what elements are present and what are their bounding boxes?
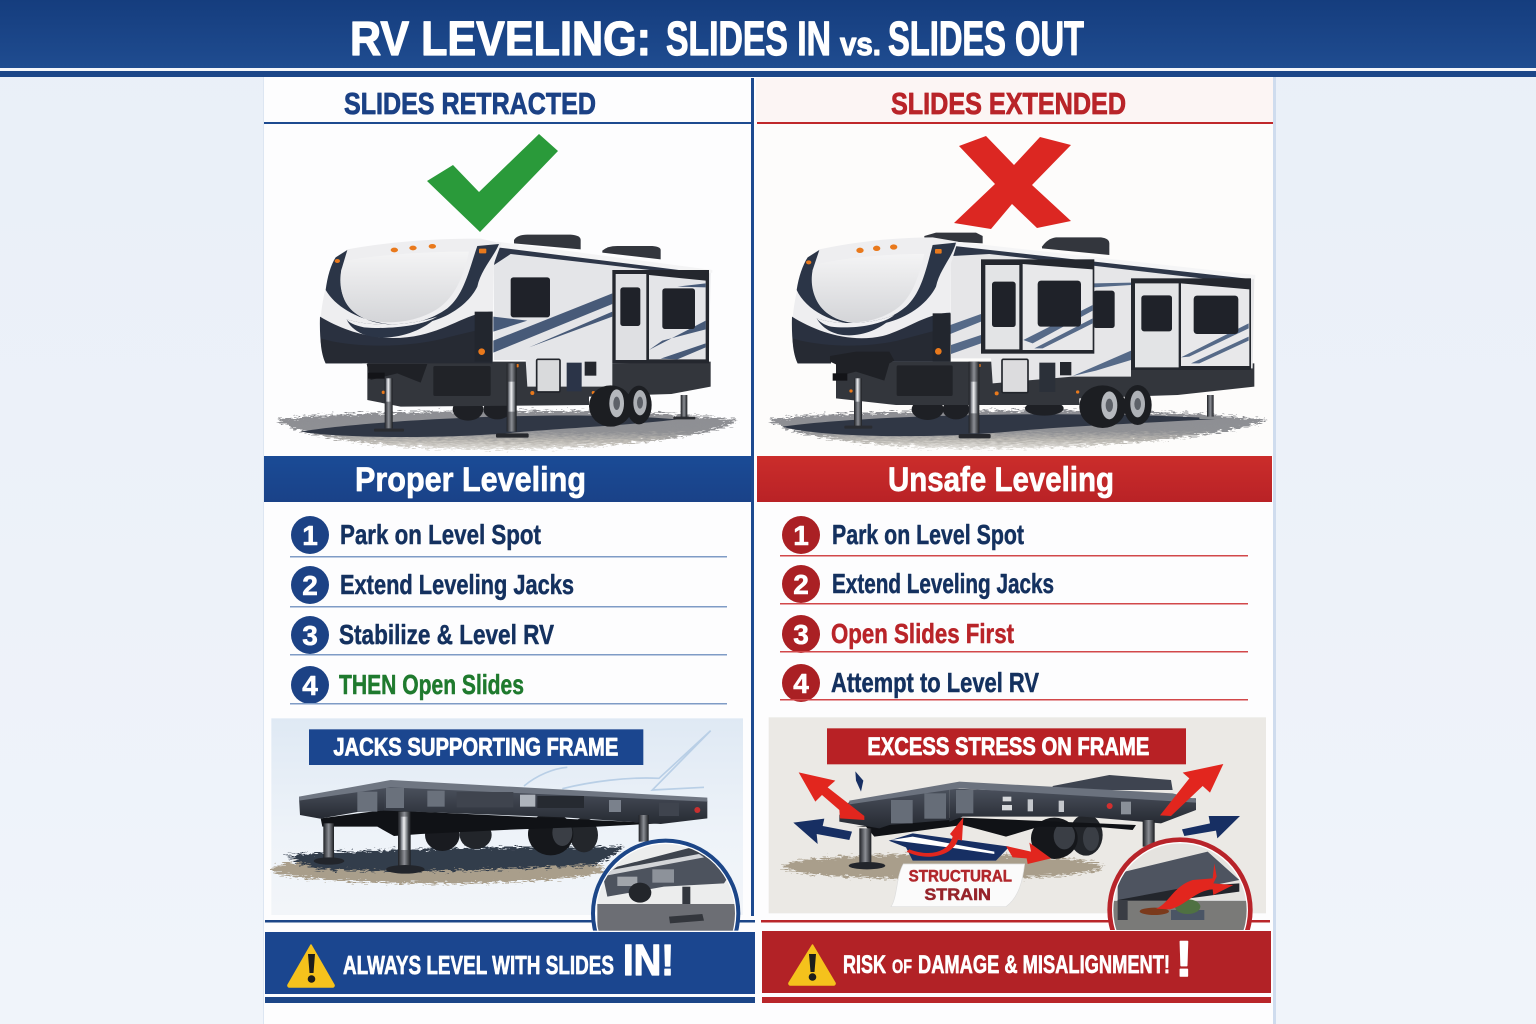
- center sheet: [263, 76, 1276, 1024]
- title: RV LEVELING:: [350, 13, 651, 66]
- right section banner: [757, 456, 1272, 502]
- step 2: Extend Leveling Jacks: [832, 568, 1054, 599]
- blue strut: [889, 833, 1009, 861]
- title: vs.: [840, 26, 881, 62]
- front cap: [320, 239, 501, 363]
- callout: structural strain: STRUCTURAL: [909, 866, 1012, 885]
- step 1: 1: [302, 520, 318, 551]
- title: SLIDES OUT: [888, 13, 1084, 66]
- chassis: [836, 362, 1254, 405]
- label: [827, 728, 1186, 764]
- left steps list: [290, 516, 727, 704]
- ground: [271, 855, 604, 883]
- callout: structural strain: STRAIN: [924, 885, 991, 904]
- body side: [494, 243, 711, 387]
- small blue pointer: [855, 771, 863, 792]
- step 3: Open Slides First: [831, 618, 1014, 649]
- arrow: curved red: [907, 817, 963, 857]
- arrow: red lower right: [1006, 843, 1051, 864]
- window: [511, 277, 550, 317]
- left warning banner: [265, 932, 755, 1003]
- jacks: [374, 363, 695, 438]
- step 4: Attempt to Level RV: [831, 667, 1039, 698]
- side swooshes: [493, 293, 612, 353]
- side swooshes: [950, 283, 1131, 376]
- thin rule left: [265, 920, 755, 922]
- step 1: Park on Level Spot: [832, 519, 1024, 550]
- roof AC units: [924, 233, 1109, 255]
- slide box: [612, 270, 709, 363]
- center divider: [751, 78, 754, 916]
- jacks: [849, 820, 1155, 869]
- right warning banner: DAMAGE & MISALIGNMENT!: [918, 951, 1170, 979]
- hitch: [367, 364, 427, 383]
- far wheels: [453, 398, 483, 421]
- slide boxes: [981, 259, 1094, 354]
- left section banner: Proper Leveling: [355, 461, 586, 499]
- step 4: [780, 664, 1248, 702]
- inset: jack close-up: [591, 838, 740, 931]
- jacks: [314, 812, 649, 874]
- left column heading: SLIDES RETRACTED: [344, 86, 596, 121]
- wheels: [1069, 814, 1103, 856]
- step 3: [290, 616, 727, 656]
- title: [350, 13, 1084, 66]
- label: JACKS SUPPORTING FRAME: [333, 734, 618, 761]
- panel: excess stress on frame: [769, 717, 1266, 913]
- arrow: red up-right: [1160, 764, 1223, 816]
- right warning banner: !: [1176, 931, 1192, 987]
- inset: blocks under jack: [1107, 837, 1253, 930]
- right warning banner: RISK: [843, 951, 886, 979]
- rear window: [1093, 291, 1115, 328]
- right column heading: SLIDES EXTENDED: [891, 86, 1126, 121]
- front cap: [792, 237, 958, 363]
- illustration: RV with slides retracted: [277, 235, 737, 449]
- wheels: [425, 819, 460, 851]
- arrow: blue left: [793, 819, 852, 844]
- left warning banner: ALWAYS LEVEL WITH SLIDES: [343, 950, 614, 980]
- left warning banner: IN!: [623, 936, 674, 985]
- right warning banner: [762, 931, 1271, 1003]
- step 1: [290, 516, 727, 558]
- ground: [783, 854, 1103, 879]
- step 4: 4: [793, 668, 809, 699]
- body side: [951, 245, 1254, 383]
- hatches: [1002, 359, 1028, 393]
- frame: [1053, 775, 1173, 790]
- icon: warning triangle: [288, 945, 334, 987]
- right section banner: Unsafe Leveling: [888, 461, 1114, 499]
- step 3: 3: [793, 619, 809, 650]
- marker lights: [806, 244, 1079, 395]
- right warning banner: OF: [892, 957, 912, 978]
- icon: red X mark: [954, 136, 1071, 229]
- frame: [321, 810, 661, 836]
- step 4: [290, 666, 727, 704]
- roof edge: [497, 242, 712, 274]
- step 1: 1: [793, 520, 809, 551]
- step 3: [780, 615, 1248, 653]
- step 3: 3: [302, 620, 318, 651]
- step 2: 2: [302, 570, 318, 601]
- jacks: [844, 362, 1221, 438]
- right steps list: [780, 516, 1248, 702]
- arrow: red up-left: [799, 772, 864, 820]
- illustration: RV with slides extended: [769, 233, 1266, 448]
- step 2: [290, 566, 727, 608]
- far wheels: [912, 399, 944, 420]
- hatches: [537, 359, 560, 392]
- hitch: [830, 352, 894, 381]
- callout: structural strain: [891, 864, 1025, 907]
- header bar: [0, 0, 1536, 77]
- left section banner: [264, 456, 751, 502]
- chassis: [367, 362, 711, 407]
- step 2: 2: [793, 569, 809, 600]
- step 3: Stabilize & Level RV: [339, 619, 554, 650]
- icon: green check mark: [427, 134, 558, 232]
- step 2: [780, 565, 1248, 604]
- marker lights: [335, 244, 595, 395]
- step 1: Park on Level Spot: [340, 519, 541, 550]
- thin rule right: [761, 920, 1270, 922]
- icon: warning triangle: [789, 945, 835, 985]
- roof edge: [956, 242, 1255, 280]
- arrow: blue right: [1182, 816, 1240, 838]
- label: EXCESS STRESS ON FRAME: [867, 734, 1149, 761]
- wheels: [1124, 385, 1152, 425]
- title: SLIDES IN: [666, 13, 831, 66]
- step 1: [780, 516, 1248, 556]
- panel: jacks supporting frame: [271, 718, 743, 915]
- roof AC units: [514, 235, 661, 259]
- step 4: THEN Open Slides: [339, 669, 524, 700]
- step 4: 4: [302, 670, 318, 701]
- wheels: [626, 386, 652, 424]
- label: [309, 729, 643, 765]
- step 2: Extend Leveling Jacks: [340, 569, 574, 600]
